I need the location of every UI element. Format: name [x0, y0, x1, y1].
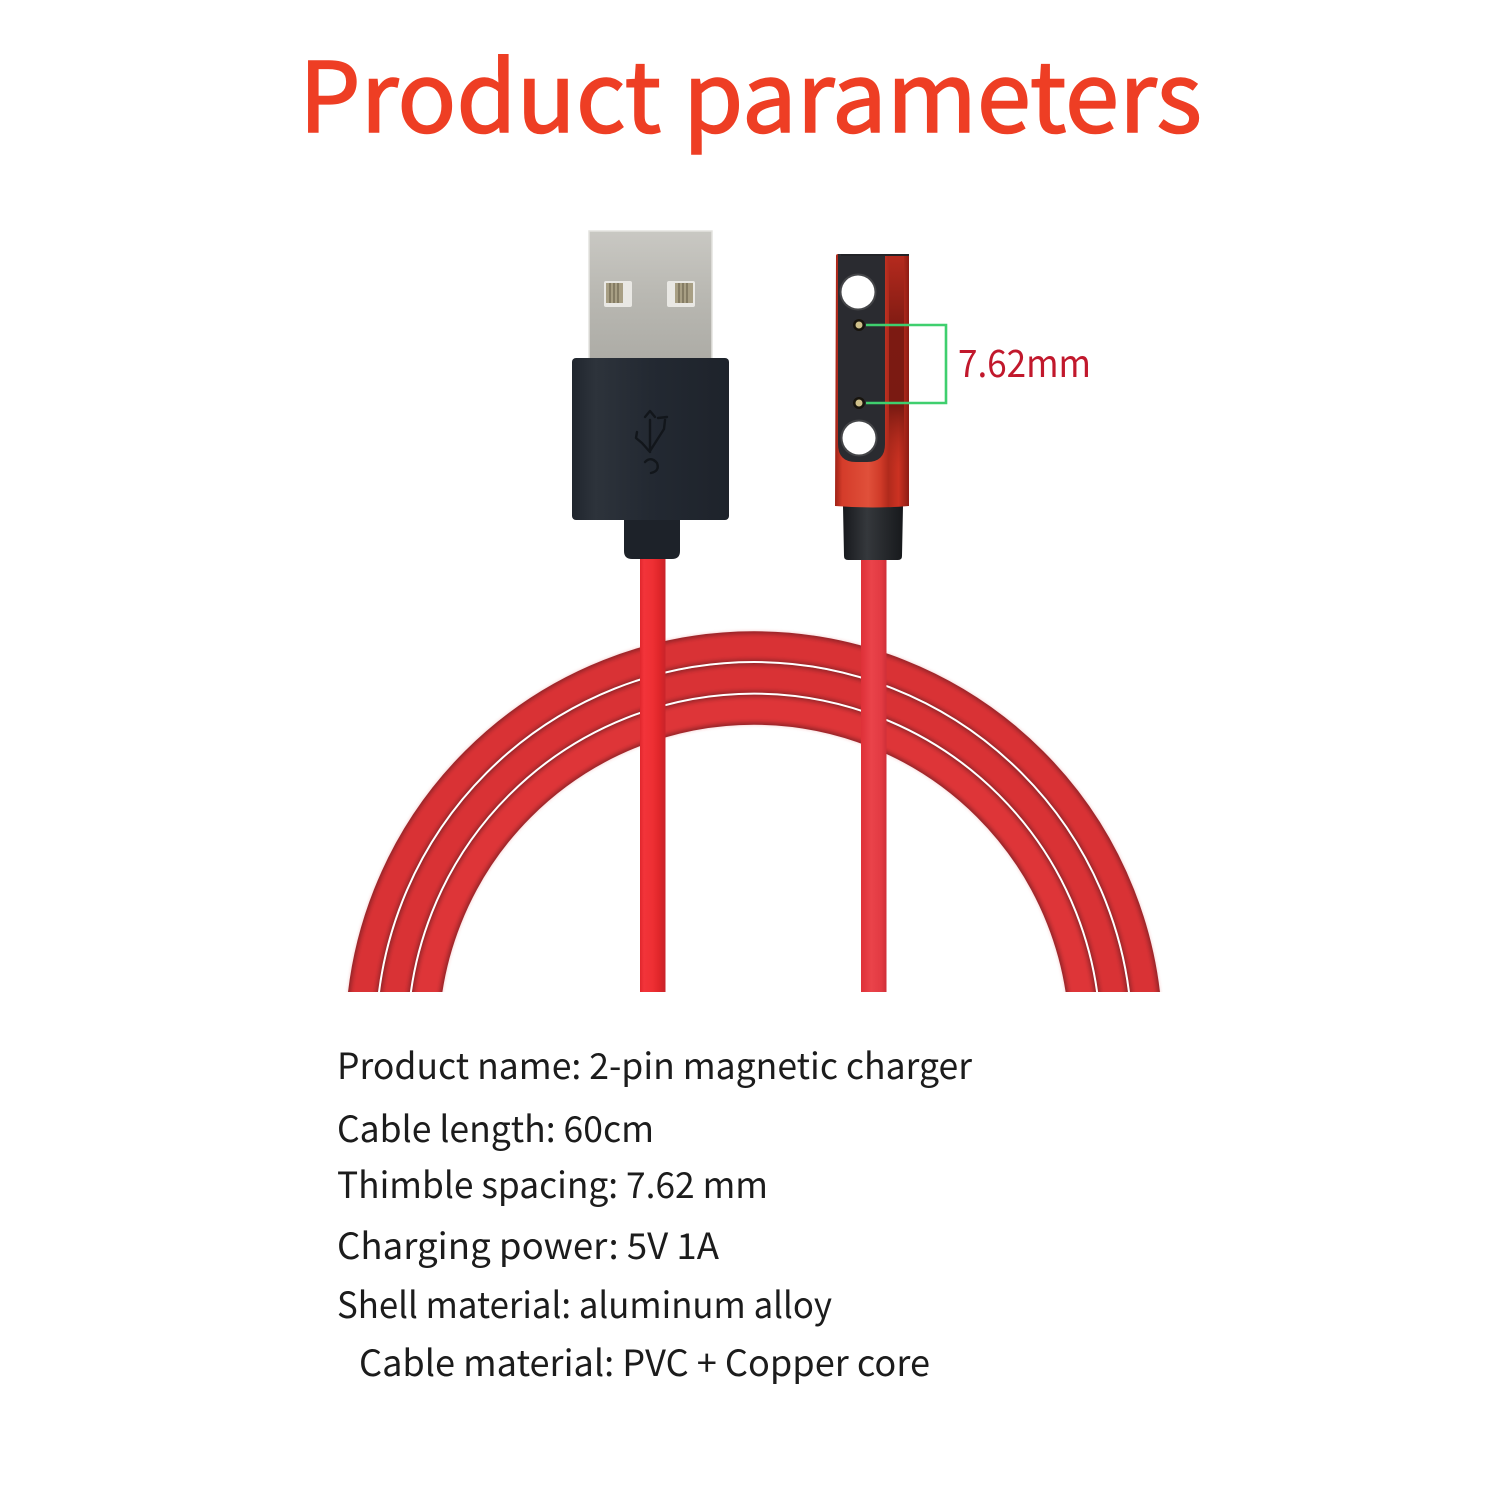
USB plug windows	[604, 281, 695, 307]
coiled red cable	[346, 630, 1162, 992]
USB cable	[640, 556, 666, 992]
shell dark reflection	[889, 256, 904, 471]
spec: product name: Product name: 2-pin magnetic charger	[337, 1038, 973, 1090]
spec: thimble spacing: Thimble spacing: 7.62 mm	[337, 1157, 768, 1209]
USB black housing	[572, 358, 729, 520]
black insert	[838, 254, 885, 462]
magnet holes	[840, 274, 876, 310]
green spacing bracket	[866, 325, 946, 403]
pins	[853, 319, 865, 331]
aluminium shell	[835, 254, 909, 508]
spacing label: 7.62mm	[958, 333, 1091, 388]
spec: charging power: Charging power: 5V 1A	[337, 1218, 719, 1270]
spec: cable material: Cable material: PVC + Copper core	[359, 1335, 930, 1387]
title: Product parameters	[299, 19, 1202, 160]
USB connector	[572, 231, 729, 992]
rubber collar	[843, 506, 903, 560]
magnetic connector cable	[861, 556, 886, 992]
specification list	[337, 1038, 973, 1387]
icon: USB trident	[636, 411, 667, 473]
USB collar	[624, 520, 680, 559]
spec: shell material: Shell material: aluminum alloy	[337, 1277, 832, 1329]
magnetic connector	[835, 254, 909, 992]
USB metal plug	[589, 231, 712, 359]
spec: cable length: Cable length: 60cm	[337, 1101, 654, 1153]
